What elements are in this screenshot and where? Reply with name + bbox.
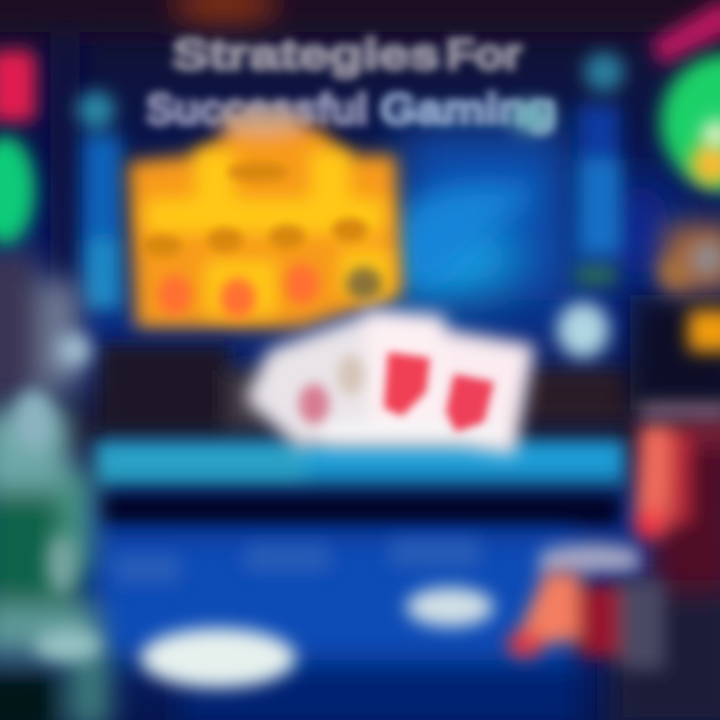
- sign body: [128, 110, 402, 328]
- machine yellow panel: [688, 310, 720, 352]
- machine dark base: [630, 295, 720, 410]
- sign dark badge: [346, 267, 382, 301]
- dark box left of cards: [100, 345, 265, 430]
- chip highlights: [12, 333, 102, 661]
- top-left neon marks: [0, 50, 36, 244]
- card suit: middle heart: [384, 352, 430, 416]
- sign yellow details: [145, 150, 390, 315]
- green circular icon: [660, 54, 720, 190]
- dark band right of cards: [525, 370, 635, 420]
- table surface: [95, 535, 580, 720]
- green disc: [660, 54, 720, 190]
- disc white highlight: [702, 120, 720, 148]
- lower stack coral: [507, 572, 665, 670]
- disc yellow core: [690, 142, 720, 186]
- pillar: left blue column: [77, 91, 122, 310]
- machine gauge: [659, 241, 720, 289]
- background: top dark band and brown glow: [0, 0, 720, 340]
- pillar: right blue column: [575, 52, 624, 285]
- card suit: right heart: [446, 374, 494, 432]
- title: For: [446, 30, 522, 79]
- title: Strategies: [172, 30, 440, 79]
- title highlight: [510, 102, 554, 132]
- icon: red neon badge: [0, 50, 36, 122]
- machine top: [665, 225, 720, 290]
- upper stack coral: [634, 420, 720, 540]
- lower stack top: [540, 543, 640, 575]
- casino building sign: [128, 110, 402, 328]
- title: Gaming: [380, 85, 556, 134]
- card bodies: [245, 308, 535, 455]
- sign window shadows: [142, 162, 368, 257]
- chip stack upper grey: [0, 250, 80, 400]
- chip stack green body: [0, 410, 110, 720]
- upper stack top highlight: [640, 405, 720, 417]
- icon: green neon dot: [0, 136, 35, 244]
- right chip stacks: [507, 405, 720, 720]
- white dome right of cards: [557, 302, 609, 358]
- title: Successful: [146, 85, 368, 134]
- card suit: left heart: [299, 384, 329, 424]
- left chip stack: [0, 250, 110, 720]
- playing cards: [245, 308, 535, 455]
- background: cyan swirl: [400, 184, 540, 290]
- table edge: cyan band: [95, 440, 625, 490]
- table surface marks: [115, 540, 480, 583]
- slot machine: [630, 225, 720, 410]
- background: blue glow behind the sign: [390, 130, 670, 300]
- right stack dark backdrop: [610, 420, 720, 720]
- table edge: dark shadow band: [100, 496, 620, 524]
- title: [146, 30, 556, 134]
- sign doors: [158, 264, 319, 318]
- card centre smudge: [338, 355, 364, 395]
- scattered white chips: [140, 587, 494, 688]
- top-right neon bar: [650, 0, 720, 66]
